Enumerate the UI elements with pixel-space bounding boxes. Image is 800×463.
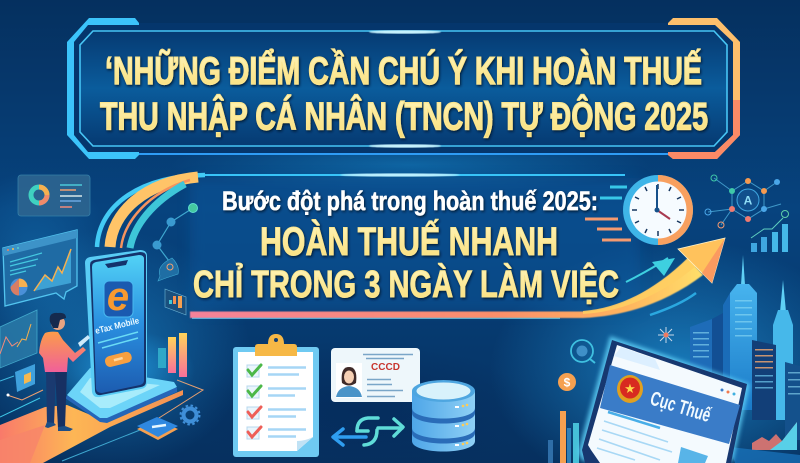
panel: CCCD id card — [331, 348, 420, 402]
icon: pie chart — [10, 278, 28, 296]
headline text: CHỈ TRONG 3 NGÀY LÀM VIỆC — [193, 262, 619, 306]
app name: eTax Mobile — [94, 315, 140, 336]
phone: eTax Mobile — [85, 250, 147, 397]
panel: headline banner — [190, 173, 640, 343]
panel: donut card — [18, 175, 90, 216]
rainbow arc — [97, 175, 205, 248]
icon: node graph — [152, 204, 198, 281]
city skyline — [690, 255, 800, 440]
headline text: HOÀN THUẾ NHANH — [260, 218, 558, 264]
panel: laptop Cục Thuế — [578, 336, 750, 463]
chart: area chart right — [730, 422, 800, 463]
city bars and bubble behind phone — [158, 289, 187, 377]
icon: network hexagon — [705, 175, 781, 228]
panel: line chart screen — [0, 310, 37, 368]
circuit lines — [0, 376, 203, 461]
card label: CCCD — [371, 362, 400, 373]
headline text: Bước đột phá trong hoàn thuế 2025: — [222, 186, 598, 216]
icon: speed lines — [585, 187, 631, 240]
headline text — [193, 186, 619, 306]
icon: eTax app: e — [107, 275, 129, 319]
icon: small tile — [15, 364, 35, 392]
icon: donut chart — [31, 187, 47, 203]
phone platform — [55, 330, 195, 423]
person — [39, 313, 90, 431]
title — [100, 48, 708, 138]
icon: globe search — [571, 340, 595, 363]
chart: bars under coin — [548, 411, 579, 463]
arrow: rising growth arrow — [190, 238, 725, 318]
icon: database — [412, 380, 475, 452]
icon: spark — [658, 327, 674, 343]
chart: mini bars right — [751, 210, 788, 252]
icon: floating tile — [137, 417, 178, 440]
icon: clock — [623, 175, 693, 245]
icon: national emblem — [617, 375, 643, 403]
panel: clipboard checklist — [233, 334, 319, 457]
laptop label: Cục Thuế — [648, 388, 714, 427]
orange floor — [0, 390, 183, 463]
icon: portrait — [336, 367, 362, 397]
checklist rows — [247, 365, 306, 439]
icon: network hexagon: A — [744, 194, 753, 208]
icon: dollar coin — [558, 373, 576, 391]
icon: sync arrows — [333, 418, 403, 445]
icon: gear — [180, 406, 200, 424]
icon: clip — [255, 334, 297, 356]
panel: title frame — [67, 18, 740, 159]
icon: dollar coin: $ — [564, 376, 571, 390]
app button — [104, 351, 133, 368]
icon: national emblem: ★ — [624, 381, 636, 396]
panel: chart bubble — [3, 230, 77, 306]
